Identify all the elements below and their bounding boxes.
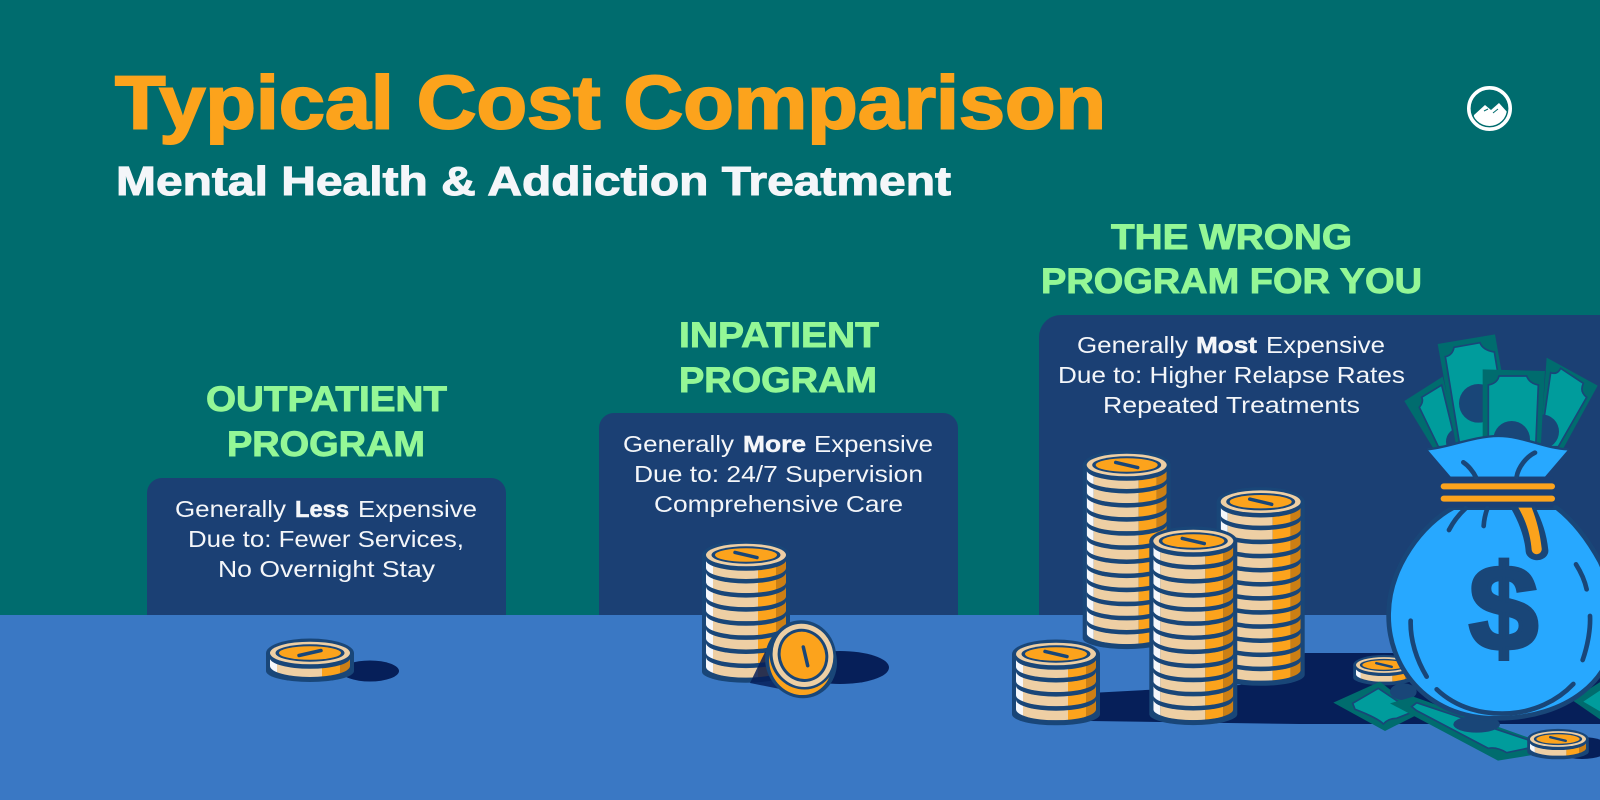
text: wrong program description: Due to: Higher Relapse Rates <box>1058 362 1405 388</box>
subtitle: Mental Health & Addiction Treatment <box>116 158 951 204</box>
text: wrong program description: Expensive <box>1266 332 1385 358</box>
bag strokes <box>1411 453 1590 714</box>
bag body <box>1389 508 1600 718</box>
shadow: large stacks and bag <box>1090 653 1600 724</box>
text: outpatient description: Less <box>295 496 349 522</box>
icon: single coin with shadow <box>266 638 399 682</box>
text: outpatient description: Due to: Fewer Services, <box>188 526 464 552</box>
heading: the wrong program for you: PROGRAM FOR YOU <box>1041 262 1422 301</box>
heading: the wrong program for you <box>1041 218 1422 301</box>
icon: coin stacks <box>1012 450 1305 725</box>
panel: wrong program <box>1039 315 1600 645</box>
title: Typical Cost Comparison <box>115 60 1106 144</box>
heading: inpatient program: INPATIENT <box>679 316 879 355</box>
text: outpatient description: No Overnight Stay <box>218 556 435 582</box>
ground <box>0 615 1600 800</box>
icon: rear coin <box>1353 655 1415 685</box>
heading: inpatient program <box>679 316 879 400</box>
text: inpatient description: Comprehensive Care <box>654 491 903 517</box>
text: inpatient description: Generally <box>623 431 734 457</box>
heading: outpatient program <box>206 380 447 464</box>
bag neck ruffle <box>1427 436 1568 477</box>
heading: outpatient program: PROGRAM <box>227 425 425 464</box>
text: wrong program description: Most <box>1196 332 1257 358</box>
text: inpatient description: Expensive <box>814 431 933 457</box>
icon: coin stack with leaning coin <box>702 540 889 710</box>
icon: front coin <box>1527 729 1600 759</box>
text: inpatient description: Due to: 24/7 Supervision <box>634 461 923 487</box>
text: outpatient description: Generally <box>175 496 286 522</box>
heading: inpatient program: PROGRAM <box>679 361 877 400</box>
text: inpatient description <box>623 431 933 517</box>
text: outpatient description: Expensive <box>358 496 477 522</box>
panel: inpatient <box>599 413 958 643</box>
panel: outpatient <box>147 478 506 648</box>
ties <box>1441 483 1555 489</box>
heading: the wrong program for you: THE WRONG <box>1111 218 1352 257</box>
text: wrong program description <box>1058 332 1405 418</box>
text: inpatient description: More <box>743 431 806 457</box>
text: outpatient description <box>175 496 477 582</box>
bills under bag <box>1333 680 1600 761</box>
bills fanned out of bag <box>1404 334 1598 458</box>
text: wrong program description: Generally <box>1077 332 1188 358</box>
icon: money bag with bills <box>1333 334 1600 761</box>
text: wrong program description: Repeated Treatments <box>1103 392 1360 418</box>
drawstring <box>1512 510 1548 560</box>
dollar sign: $ <box>1469 540 1538 677</box>
heading: outpatient program: OUTPATIENT <box>206 380 447 419</box>
logo <box>1469 88 1510 135</box>
